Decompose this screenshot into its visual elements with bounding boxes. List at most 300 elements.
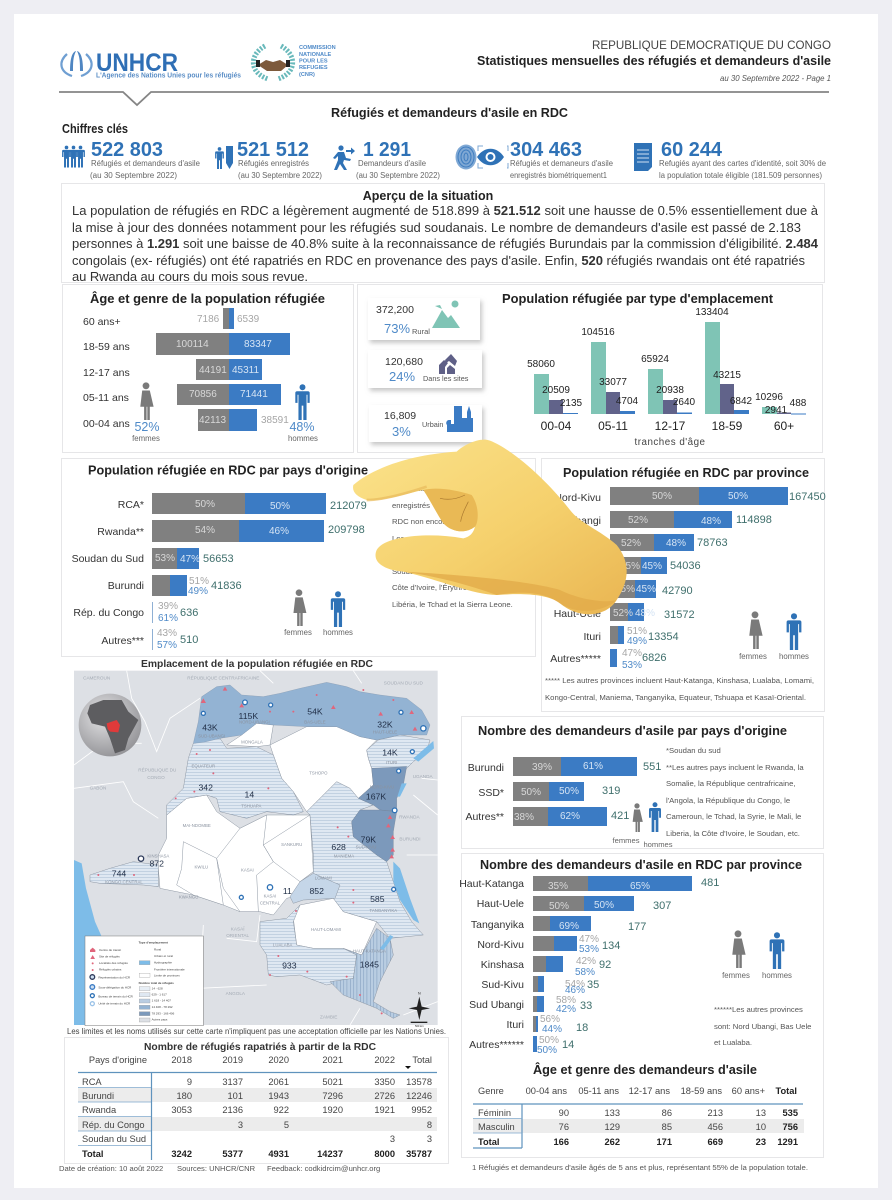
stacked bars: 45% bbox=[642, 561, 662, 572]
header titles: au 30 Septembre 2022 - Page 1 bbox=[720, 74, 831, 83]
main title: Réfugiés et demandeurs d'asile en RDC bbox=[331, 106, 568, 120]
stacked bars: Haut-Uele bbox=[554, 608, 601, 620]
footer: credits bbox=[59, 1164, 380, 1173]
bar chart: tranches d'âge: 60+ bbox=[774, 419, 794, 433]
table: 3242 bbox=[171, 1149, 192, 1159]
stacked bars: 48% bbox=[635, 608, 655, 619]
table: 5377 bbox=[222, 1149, 243, 1159]
province labels: MANIEMA bbox=[334, 854, 354, 859]
icon: femmes et hommes: hommes bbox=[779, 652, 809, 661]
country labels: CAMEROUN bbox=[83, 676, 110, 681]
bar chart: tranches d'âge: 12-17 bbox=[655, 419, 686, 433]
footnote bbox=[666, 746, 804, 838]
stacked bars: 58% bbox=[575, 967, 595, 978]
stacked bars: 53% bbox=[622, 660, 642, 671]
logo: CNR: (CNR) bbox=[299, 72, 315, 78]
bar chart: tranches d'âge: tranches d'âge bbox=[635, 437, 706, 448]
bar chart: tranches d'âge: 133404 bbox=[695, 307, 729, 318]
map legend: Centre de transit bbox=[99, 948, 121, 952]
table: 3350 bbox=[374, 1077, 395, 1087]
footnote: RDC non encore bbox=[392, 517, 449, 526]
stacked bars: 49% bbox=[188, 586, 208, 597]
pyramid chart: 38591 bbox=[261, 415, 289, 426]
footnote: Somalie, la République centrafricaine, bbox=[666, 779, 795, 788]
bar chart: tranches d'âge: 43215 bbox=[713, 370, 741, 381]
icon: femmes et hommes: femmes bbox=[612, 836, 640, 845]
footnote: Côte d'Ivoire, l'Érythrée, bbox=[392, 583, 474, 592]
stacked bars: 42% bbox=[576, 956, 596, 967]
table: âge et genre: 1291 bbox=[777, 1137, 798, 1147]
footnote: Kongo-Central, Maniema, Tanganyika, Equateur, Tshuapa et Kasaï-Oriental. bbox=[545, 693, 806, 702]
stacked bars: 50% bbox=[652, 491, 672, 502]
globe bbox=[79, 694, 141, 756]
table: âge et genre: 76 bbox=[559, 1122, 569, 1132]
stacked bars: Sud Ubangi bbox=[546, 585, 601, 597]
stacked bars: 54036 bbox=[670, 560, 701, 572]
stacked bars: 167450 bbox=[789, 491, 826, 503]
icon: femmes bbox=[132, 382, 160, 443]
panel: aperçu de la situation: au Rwanda au cours du mois sous revue. bbox=[72, 269, 308, 284]
table: 3 bbox=[238, 1120, 243, 1130]
refugee count labels bbox=[112, 707, 398, 970]
KPI: 521 512: (au 30 Septembre 2022) bbox=[238, 171, 322, 180]
table: 3 bbox=[427, 1134, 432, 1144]
table: 9952 bbox=[411, 1105, 432, 1115]
table: âge et genre: 60 ans+ bbox=[732, 1086, 765, 1096]
table: 8 bbox=[427, 1120, 432, 1130]
card: urbain bbox=[369, 405, 482, 442]
logo: CNR bbox=[253, 45, 336, 79]
footer: credits: Feedback: codkidrcim@unhcr.org bbox=[267, 1164, 380, 1173]
province labels: KINSHASA bbox=[147, 854, 169, 859]
map legend: Frontière internationale bbox=[154, 967, 185, 971]
stacked bars: 61% bbox=[158, 613, 178, 624]
map: location of refugee population bbox=[74, 671, 438, 1028]
stacked bars: 47% bbox=[180, 554, 200, 565]
stacked bars: 45% bbox=[636, 584, 656, 595]
refugee count labels: 14K bbox=[382, 747, 398, 757]
pyramid chart: 42113 bbox=[199, 415, 227, 426]
table: âge et genre: 00-04 ans bbox=[526, 1086, 567, 1096]
stacked bars: 31572 bbox=[664, 609, 695, 621]
table: Soudan du Sud bbox=[82, 1134, 146, 1144]
table: âge et genre: 18-59 ans bbox=[681, 1086, 722, 1096]
stacked bars: Nord-Kivu bbox=[477, 939, 524, 951]
KPI: 304 463: Réfugiés et demaneurs d'asile bbox=[510, 159, 614, 168]
header rule with chevron bbox=[59, 92, 829, 105]
bar chart: tranches d'âge: 104516 bbox=[581, 327, 615, 338]
card: rural: 73% bbox=[384, 321, 410, 336]
stacked bars: 46% bbox=[269, 526, 289, 537]
stacked bars: 52% bbox=[613, 608, 633, 619]
stacked bars: 551 bbox=[643, 761, 661, 773]
table: âge et genre: Masculin bbox=[478, 1122, 515, 1132]
table: Total bbox=[412, 1055, 432, 1065]
stacked bars bbox=[465, 757, 661, 826]
KPI: 1 291 bbox=[333, 139, 440, 180]
refugee count labels: 79K bbox=[361, 834, 376, 844]
stacked bars: Haut-Uele bbox=[477, 898, 524, 910]
footer: credits: Date de création: 10 août 2022 bbox=[59, 1164, 163, 1173]
logo: UNHCR: L'Agence des Nations Unies pour les réfugiés bbox=[96, 70, 241, 80]
heading: Nombre des demandeurs d'asile en RDC par province bbox=[480, 857, 802, 872]
stacked bars: 50% bbox=[559, 786, 579, 797]
province labels: MAI-NDOMBE bbox=[183, 823, 211, 828]
stacked bars: Haut-Katanga bbox=[459, 878, 524, 890]
stacked bars: 35% bbox=[548, 881, 568, 892]
country labels: ANGOLA bbox=[226, 991, 246, 996]
stacked bars: 50% bbox=[594, 900, 614, 911]
table: 2019 bbox=[222, 1055, 243, 1065]
table: Burundi bbox=[82, 1091, 114, 1101]
table: 7296 bbox=[322, 1091, 343, 1101]
heading: Chiffres clés: Chiffres clés bbox=[62, 121, 128, 136]
pyramid chart: 70856 bbox=[189, 389, 217, 400]
panel: aperçu de la situation: la mise à jour des données notamment pour les réfugiés sud soudanais. Le nombre de demandeurs d'asile est passé de 2.183 bbox=[72, 220, 801, 235]
card: urbain: 3% bbox=[392, 424, 411, 439]
table: âge et genre: 86 bbox=[662, 1108, 672, 1118]
panel: âge et genre de la population réfugiée bbox=[62, 284, 354, 452]
panel: aperçu de la situation: congolais (ex- réfugiés) ont été rapatriés en RDC en provenance des pays d'asile. Enfin, 520 réfugiés rwandais ont été rapatriés bbox=[72, 253, 806, 268]
footnote: ***** Les autres provinces incluent Haut-Katanga, Kinshasa, Lualaba, Lomami, bbox=[545, 676, 814, 685]
bar chart: tranches d'âge: 2135 bbox=[560, 398, 583, 409]
stacked bars: 14 bbox=[562, 1039, 574, 1051]
table: 2021 bbox=[322, 1055, 343, 1065]
stacked bars: 43% bbox=[157, 628, 177, 639]
icon: femmes et hommes bbox=[722, 930, 792, 980]
table: 2726 bbox=[374, 1091, 395, 1101]
stacked bars: Bas-Uele bbox=[558, 561, 601, 573]
map legend: Sous-délégation du HCR bbox=[98, 986, 132, 990]
refugee count labels: 852 bbox=[309, 886, 324, 896]
icon: femmes et hommes: femmes bbox=[739, 652, 767, 661]
stacked bars: 78763 bbox=[697, 537, 728, 549]
kivu provinces bbox=[358, 767, 407, 812]
pyramid chart: 100114 bbox=[176, 339, 209, 350]
stacked bars: 134 bbox=[602, 940, 620, 952]
province labels: ITURI bbox=[386, 760, 397, 765]
pyramid chart: 60 ans+ bbox=[83, 316, 121, 328]
country labels: ORIENTAL bbox=[226, 933, 250, 938]
stacked bars: 481 bbox=[701, 877, 719, 889]
refugee count labels: 628 bbox=[331, 842, 346, 852]
table: Pays d'origine bbox=[89, 1055, 147, 1065]
logo: CNR: COMMISSION bbox=[299, 45, 336, 51]
bar chart: tranches d'âge: 20509 bbox=[542, 385, 570, 396]
stacked bars: SSD* bbox=[478, 787, 504, 799]
table: 2061 bbox=[268, 1077, 289, 1087]
stacked bars: 65% bbox=[630, 881, 650, 892]
bar chart: tranches d'âge: 05-11 bbox=[598, 419, 628, 433]
country labels bbox=[83, 675, 434, 1019]
stacked bars: 61% bbox=[583, 761, 603, 772]
stacked bars: 41836 bbox=[211, 580, 242, 592]
stacked bars: 39% bbox=[532, 762, 552, 773]
table: 13578 bbox=[406, 1077, 432, 1087]
KPI: 60 244: 60 244 bbox=[661, 139, 723, 161]
KPI: 522 803: 522 803 bbox=[91, 139, 163, 161]
table: 2020 bbox=[268, 1055, 289, 1065]
stacked bars: 319 bbox=[602, 785, 620, 797]
map legend: Localités des réfugiés bbox=[99, 961, 128, 965]
card: rural bbox=[368, 298, 480, 340]
table: âge et genre: 669 bbox=[707, 1137, 723, 1147]
refugee count labels: 14 bbox=[245, 790, 254, 800]
province labels: BAS-UELE bbox=[304, 719, 326, 724]
stacked bars: 48% bbox=[666, 538, 686, 549]
map legend: Urbain et rural bbox=[154, 954, 173, 958]
icon: femmes et hommes bbox=[284, 589, 353, 637]
refugee count labels: 11 bbox=[283, 886, 292, 896]
field offices bbox=[138, 700, 426, 899]
stacked bars: Rwanda** bbox=[97, 526, 144, 538]
province labels: KASAI bbox=[241, 868, 254, 873]
header titles: REPUBLIQUE DEMOCRATIQUE DU CONGO bbox=[592, 38, 831, 52]
icon: femmes et hommes: hommes bbox=[643, 840, 673, 849]
card: dans les sites bbox=[368, 350, 482, 388]
stacked bars: 177 bbox=[628, 921, 646, 933]
footnote: incluent bbox=[392, 550, 419, 559]
stacked bars: 510 bbox=[180, 634, 198, 646]
stacked bars bbox=[72, 493, 367, 651]
KPI: 522 803: Réfugiés et demandeurs d'asile bbox=[91, 159, 201, 168]
map legend: Nombre total de réfugiés bbox=[139, 981, 174, 985]
footnote: sont: Nord Ubangi, Bas Uele bbox=[714, 1022, 811, 1031]
icon: pinching hand emoji bbox=[353, 440, 627, 614]
table: 2022 bbox=[374, 1055, 395, 1065]
KPI: 304 463: 304 463 bbox=[510, 139, 582, 161]
panel: demandeurs d'asile par pays d'origine bbox=[462, 716, 824, 849]
KPI: 521 512 bbox=[215, 139, 322, 180]
stacked bars: 52% bbox=[621, 538, 641, 549]
stacked bars: 51% bbox=[627, 626, 647, 637]
province labels: KASAI bbox=[264, 893, 276, 898]
stacked bars: Nord Ubangi bbox=[542, 515, 601, 527]
stacked bars: 48% bbox=[701, 516, 721, 527]
table: âge et genre: 05-11 ans bbox=[578, 1086, 619, 1096]
KPI: 1 291: (au 30 Septembre 2022) bbox=[356, 171, 440, 180]
table: âge et genre: Féminin bbox=[478, 1108, 511, 1118]
province labels: TSHUAPA bbox=[241, 803, 262, 808]
table: âge et genre: 129 bbox=[604, 1122, 620, 1132]
footnote bbox=[545, 676, 814, 702]
stacked bars: 18 bbox=[576, 1022, 588, 1034]
bar chart: tranches d'âge: 33077 bbox=[599, 377, 627, 388]
stacked bars: 38% bbox=[514, 812, 534, 823]
heading: Population réfugiée par type d'emplacement bbox=[502, 292, 774, 306]
stacked bars: 44% bbox=[542, 1024, 562, 1035]
KPI: 522 803 bbox=[62, 139, 201, 180]
stacked bars: 55% bbox=[620, 561, 640, 572]
table: 1920 bbox=[322, 1105, 343, 1115]
card: urbain: Urbain bbox=[422, 420, 444, 429]
refugee count labels: 54K bbox=[307, 707, 323, 717]
map legend: 78 293 - 166 406 bbox=[152, 1011, 175, 1015]
table: 3 bbox=[390, 1134, 395, 1144]
stacked bars: 57% bbox=[157, 640, 177, 651]
pyramid chart: 18-59 ans bbox=[83, 341, 130, 353]
province labels: HAUT-LOMAMI bbox=[311, 927, 341, 932]
footer: credits: Sources: UNHCR/CNR bbox=[177, 1164, 256, 1173]
table: 1921 bbox=[374, 1105, 395, 1115]
stacked bars: 51% bbox=[189, 576, 209, 587]
table: 2136 bbox=[222, 1105, 243, 1115]
stacked bars: 33 bbox=[580, 1000, 592, 1012]
province labels: TSHOPO bbox=[309, 771, 328, 776]
stacked bars: 50% bbox=[728, 491, 748, 502]
panel: demandeurs d'asile par province et par âge bbox=[459, 854, 824, 1158]
heading: Nombre des demandeurs d'asile par pays d'origine bbox=[478, 723, 787, 738]
pyramid chart: 05-11 ans bbox=[83, 392, 129, 404]
pyramid chart: 7186 bbox=[197, 314, 220, 325]
map heading: Emplacement de la population réfugiée en RDC bbox=[141, 658, 373, 670]
map legend bbox=[85, 936, 203, 1026]
pyramid chart: 71441 bbox=[240, 389, 268, 400]
stacked bars bbox=[459, 876, 719, 1056]
province labels: NORD-UBANGI bbox=[239, 719, 270, 724]
table: 35787 bbox=[406, 1149, 432, 1159]
stacked bars: 50% bbox=[549, 901, 569, 912]
footnote: Cameroun, le Tchad, la Syrie, le Mali, le bbox=[666, 812, 801, 821]
KPI: 1 291: Demandeurs d'asile bbox=[358, 159, 427, 168]
province labels: TANGANYIKA bbox=[370, 908, 397, 913]
logo: UNHCR: UNHCR bbox=[96, 49, 178, 77]
map legend: 1 618 - 14 407 bbox=[152, 999, 171, 1003]
card: dans les sites: Dans les sites bbox=[423, 374, 469, 383]
footnote bbox=[714, 1005, 811, 1047]
bar chart: tranches d'âge: 2941 bbox=[765, 405, 788, 416]
refugee count labels: 115K bbox=[239, 711, 258, 721]
bar chart: tranches d'âge: 10296 bbox=[755, 392, 783, 403]
stacked bars: 421 bbox=[611, 810, 629, 822]
neighbouring borders bbox=[74, 671, 438, 1025]
map legend: 14 - 628 bbox=[152, 986, 163, 990]
table: 9 bbox=[187, 1077, 192, 1087]
KPI: 60 244: Refugiés ayant des cartes d'identité, soit 30% de bbox=[659, 159, 827, 168]
table: RCA bbox=[82, 1077, 102, 1087]
map legend: Représentation du HCR bbox=[98, 975, 131, 979]
map legend: Réfugiés urbains bbox=[99, 968, 122, 972]
heading: Âge et genre de la population réfugiée bbox=[90, 291, 325, 306]
stacked bars: 50% bbox=[539, 1035, 559, 1046]
icon: hommes: 48% bbox=[289, 420, 315, 434]
table: âge et genre: Genre bbox=[478, 1086, 504, 1096]
map legend: Site de réfugiés bbox=[99, 955, 120, 959]
country labels: ZAMBIE bbox=[320, 1014, 337, 1019]
refugee count labels: 167K bbox=[366, 792, 386, 802]
bar chart: tranches d'âge: 65924 bbox=[641, 354, 669, 365]
logo: UNHCR bbox=[61, 49, 241, 80]
stacked bars: 56% bbox=[540, 1014, 560, 1025]
map legend: Autres pays bbox=[152, 1018, 168, 1022]
table: 4931 bbox=[268, 1149, 289, 1159]
icon: femmes et hommes: hommes bbox=[323, 628, 353, 637]
province labels: LUALABA bbox=[273, 943, 293, 948]
stacked bars: Burundi bbox=[108, 580, 144, 592]
stacked bars: 6826 bbox=[642, 652, 666, 664]
table: 3137 bbox=[222, 1077, 243, 1087]
footnote: ******Les autres provinces bbox=[714, 1005, 803, 1014]
stacked bars: 47% bbox=[622, 648, 642, 659]
country labels: RÉPUBLIQUE CENTRAFRICAINE bbox=[187, 675, 259, 681]
country labels: UGANDA bbox=[413, 774, 434, 779]
stacked bars: Autres*** bbox=[101, 635, 144, 647]
table: 922 bbox=[273, 1105, 289, 1115]
markers bbox=[97, 687, 417, 1014]
stacked bars: 35 bbox=[587, 979, 599, 991]
province labels: KWANGO bbox=[179, 895, 199, 900]
icon: north arrow bbox=[409, 991, 430, 1028]
stacked bars: 47% bbox=[579, 934, 599, 945]
stacked bars: 53% bbox=[579, 944, 599, 955]
footnote: enregistrés bbox=[392, 501, 430, 510]
panel: aperçu de la situation bbox=[62, 184, 824, 284]
card: rural: 372,200 bbox=[376, 304, 414, 316]
bar chart: tranches d'âge: 6842 bbox=[730, 396, 753, 407]
icon: femmes et hommes: femmes bbox=[284, 628, 312, 637]
table: Total bbox=[82, 1149, 104, 1159]
stacked bars: Rép. du Congo bbox=[73, 607, 144, 619]
stacked bars: 56653 bbox=[203, 553, 234, 565]
province labels: NORD-KIVU bbox=[370, 784, 394, 789]
stacked bars: Soudan du Sud bbox=[72, 553, 144, 565]
table: Rép. du Congo bbox=[82, 1120, 145, 1130]
heading: Population réfugiée en RDC par pays d'origine bbox=[88, 462, 368, 478]
country labels: RÉPUBLIQUE DU bbox=[138, 767, 176, 773]
stacked bars: 49% bbox=[627, 636, 647, 647]
KPI: 521 512: Réfugiés enregistrés bbox=[238, 159, 309, 168]
refugee count labels: 32K bbox=[377, 719, 393, 729]
map legend: Unité de terrain du HCR bbox=[98, 1002, 131, 1006]
table: âge et genre: 10 bbox=[756, 1122, 766, 1132]
KPI: 60 244: la population totale éligible (181.509 personnes) bbox=[659, 171, 822, 180]
KPI: 521 512: 521 512 bbox=[237, 139, 309, 161]
country labels: SOUDAN DU SUD bbox=[384, 680, 423, 685]
stacked bars: 114898 bbox=[736, 514, 772, 526]
refugee count labels: 342 bbox=[198, 782, 213, 792]
stacked bars: 636 bbox=[180, 607, 198, 619]
province labels: SANKURU bbox=[281, 842, 302, 847]
stacked bars: 69% bbox=[559, 921, 579, 932]
heading: âge et genre des demandeurs: Âge et genre des demandeurs d'asile bbox=[533, 1062, 757, 1077]
stacked bars: Burundi bbox=[468, 762, 504, 774]
stacked bars: Ituri bbox=[506, 1019, 524, 1031]
footnote: Les autres pays bbox=[392, 534, 446, 543]
table: âge et genre bbox=[473, 1086, 804, 1148]
stacked bars: Autres****** bbox=[469, 1039, 524, 1051]
icon: femmes et hommes: femmes bbox=[722, 971, 750, 980]
map legend: 14 408 - 78 292 bbox=[152, 1005, 173, 1009]
stacked bars: Tanganyika bbox=[471, 919, 524, 931]
logo: CNR: POUR LES bbox=[299, 58, 328, 64]
footnote: l'Angola, la République du Congo, le bbox=[666, 796, 790, 805]
logo: CNR: REFUGIES bbox=[299, 65, 328, 71]
provinces without refugees bbox=[158, 795, 313, 915]
province labels: KWILU bbox=[194, 865, 208, 870]
stacked bars: 46% bbox=[565, 985, 585, 996]
table: 3053 bbox=[171, 1105, 192, 1115]
bar chart: tranches d'âge: 18-59 bbox=[712, 419, 743, 433]
refugee count labels: 744 bbox=[112, 868, 126, 878]
stacked bars: 42% bbox=[556, 1004, 576, 1015]
stacked bars: Sud-Kivu bbox=[558, 538, 601, 550]
card: dans les sites: 24% bbox=[389, 369, 415, 384]
table: 8000 bbox=[374, 1149, 395, 1159]
province labels: LOMAMI bbox=[315, 876, 332, 881]
table: âge et genre: 262 bbox=[604, 1137, 620, 1147]
stacked bars: 209798 bbox=[328, 524, 365, 536]
stacked bars bbox=[542, 487, 826, 671]
